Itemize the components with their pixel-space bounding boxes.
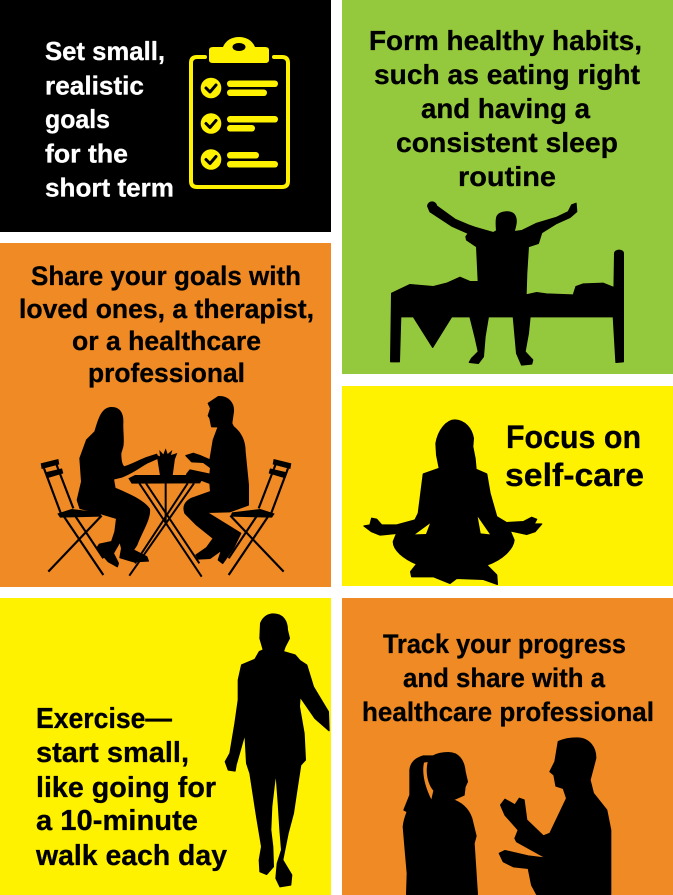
heading: exercise: Exercise— [36,703,172,735]
chair right [229,459,291,575]
panel: track your progress [342,598,673,895]
panel: focus on self-care [342,386,673,586]
illustration: woman meditating [364,420,542,584]
heading: exercise: a 10-minute [36,805,198,837]
heading: focus on self-care [505,419,644,493]
heading: share your goals: or a healthcare [72,326,261,356]
icon: clipboard checklist [191,37,288,187]
patient [403,753,477,894]
heading: exercise: like going for [36,772,216,804]
chair left [41,459,103,575]
heading: set small realistic goals [45,36,174,202]
heading: form healthy habits: consistent sleep [396,127,618,158]
heading: focus on self-care: self-care [505,457,644,493]
panel: exercise [0,598,331,895]
woman [77,408,157,567]
heading: set small realistic goals: Set small, [45,36,165,66]
heading: exercise: start small, [36,737,189,769]
panel: share your goals [0,243,331,587]
heading: form healthy habits: routine [458,161,556,192]
heading: share your goals [19,261,314,388]
heading: set small realistic goals: for the [45,138,128,168]
heading: track your progress: Track your progress [383,629,626,659]
heading: set small realistic goals: goals [45,104,110,134]
heading: track your progress [362,629,654,727]
panel: set small realistic goals [0,0,331,232]
heading: share your goals: loved ones, a therapist, [19,294,314,324]
heading: share your goals: Share your goals with [31,261,301,291]
illustration: patient and healthcare professional talking [403,738,611,894]
heading: set small realistic goals: realistic [45,70,144,100]
man [184,397,248,563]
panel: form healthy habits [342,0,673,374]
heading: form healthy habits [369,25,642,192]
heading: form healthy habits: and having a [421,93,591,124]
healthcare professional [499,738,611,894]
heading: exercise [35,703,227,872]
heading: track your progress: and share with a [403,663,605,693]
illustration: woman walking [225,614,329,887]
illustration: person stretching on bed [391,202,623,365]
heading: share your goals: professional [88,358,245,388]
heading: track your progress: healthcare professional [362,697,654,727]
heading: form healthy habits: such as eating right [374,59,640,90]
heading: focus on self-care: Focus on [506,419,641,455]
table with potted plant [128,448,203,577]
heading: form healthy habits: Form healthy habits, [369,25,642,56]
heading: exercise: walk each day [35,840,227,872]
illustration: two people at cafe table [41,397,291,577]
heading: set small realistic goals: short term [45,172,174,202]
